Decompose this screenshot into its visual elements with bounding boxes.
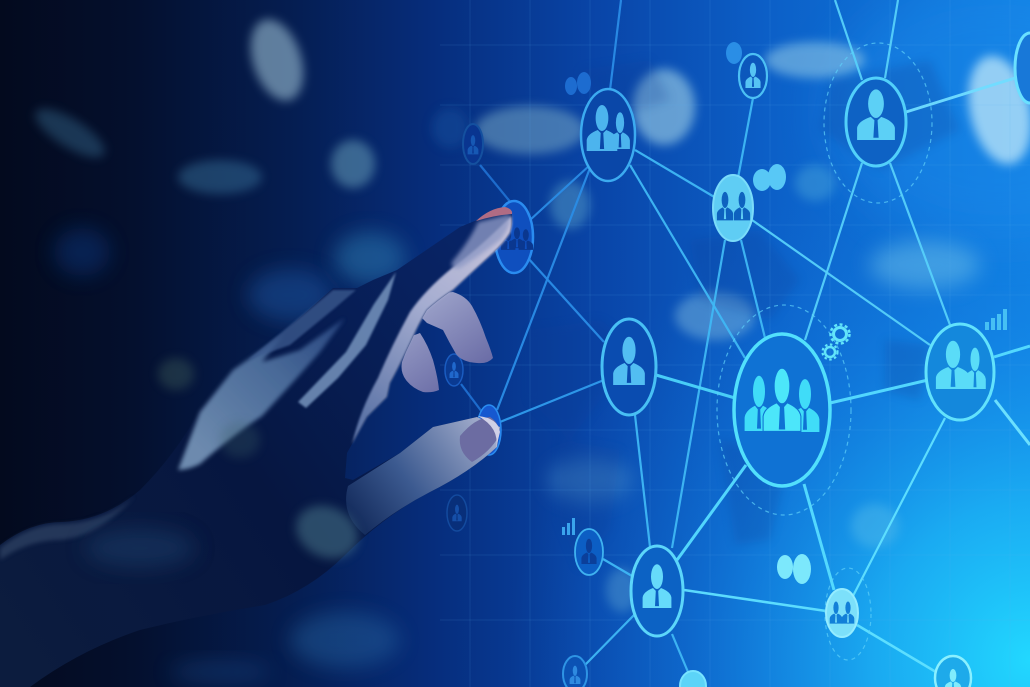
thumb nail rim: [478, 416, 500, 448]
icon: gears: [822, 324, 850, 360]
node: touched by index finger: [495, 201, 533, 273]
fingernail: thumb: [460, 417, 499, 462]
node: small behind fingers: [445, 354, 463, 386]
node: central left person: [602, 319, 656, 415]
icon: bar chart right: [985, 309, 1007, 330]
ring finger: [402, 333, 439, 392]
node: top-left team: [581, 89, 635, 181]
node: right team: [926, 324, 994, 420]
node: small beside palm: [447, 495, 467, 531]
node: lower left small: [575, 529, 603, 575]
node: far top-right partial: [1015, 33, 1030, 103]
faint world map silhouette: [530, 60, 960, 570]
tendon streak: [298, 272, 396, 408]
thumb: [346, 417, 500, 535]
index finger lit edge: [352, 216, 512, 444]
node: bottom left: [563, 656, 587, 687]
middle finger: [420, 292, 493, 363]
node: bottom centre: [680, 671, 706, 687]
icon: speech bubbles lower: [777, 554, 811, 584]
node: touched by thumb: [477, 405, 501, 455]
node: top-right person: [846, 78, 906, 166]
hand: [0, 207, 512, 687]
node: filled pale team: [713, 175, 753, 241]
fingernail: index: [476, 207, 512, 221]
node: small far-left top: [463, 124, 483, 164]
faint screen grid: [440, 0, 1030, 687]
dashed orbit rings: [717, 43, 932, 660]
node: bottom right: [935, 656, 971, 687]
index fingertip light: [452, 214, 510, 268]
node: filled pale lower right: [826, 589, 858, 637]
bokeh over hand: [287, 496, 367, 568]
forearm top light: [0, 496, 135, 560]
knuckle ridge: [248, 290, 356, 360]
icon: speech bubbles top left: [565, 72, 591, 95]
back of hand highlight: [178, 318, 345, 470]
icon: bar chart lower left: [562, 518, 575, 535]
palm, wrist and fingers: [0, 208, 512, 687]
node: top small: [739, 54, 767, 98]
icons: speech bubbles, gears and charts: [562, 42, 1007, 584]
icon: speech bubbles top: [753, 164, 786, 191]
network connection lines: [461, 0, 1030, 672]
node: large central team: [734, 334, 830, 486]
icon: speech bubble far top: [726, 42, 742, 64]
node: lower person: [631, 546, 683, 636]
network nodes: [445, 33, 1030, 687]
